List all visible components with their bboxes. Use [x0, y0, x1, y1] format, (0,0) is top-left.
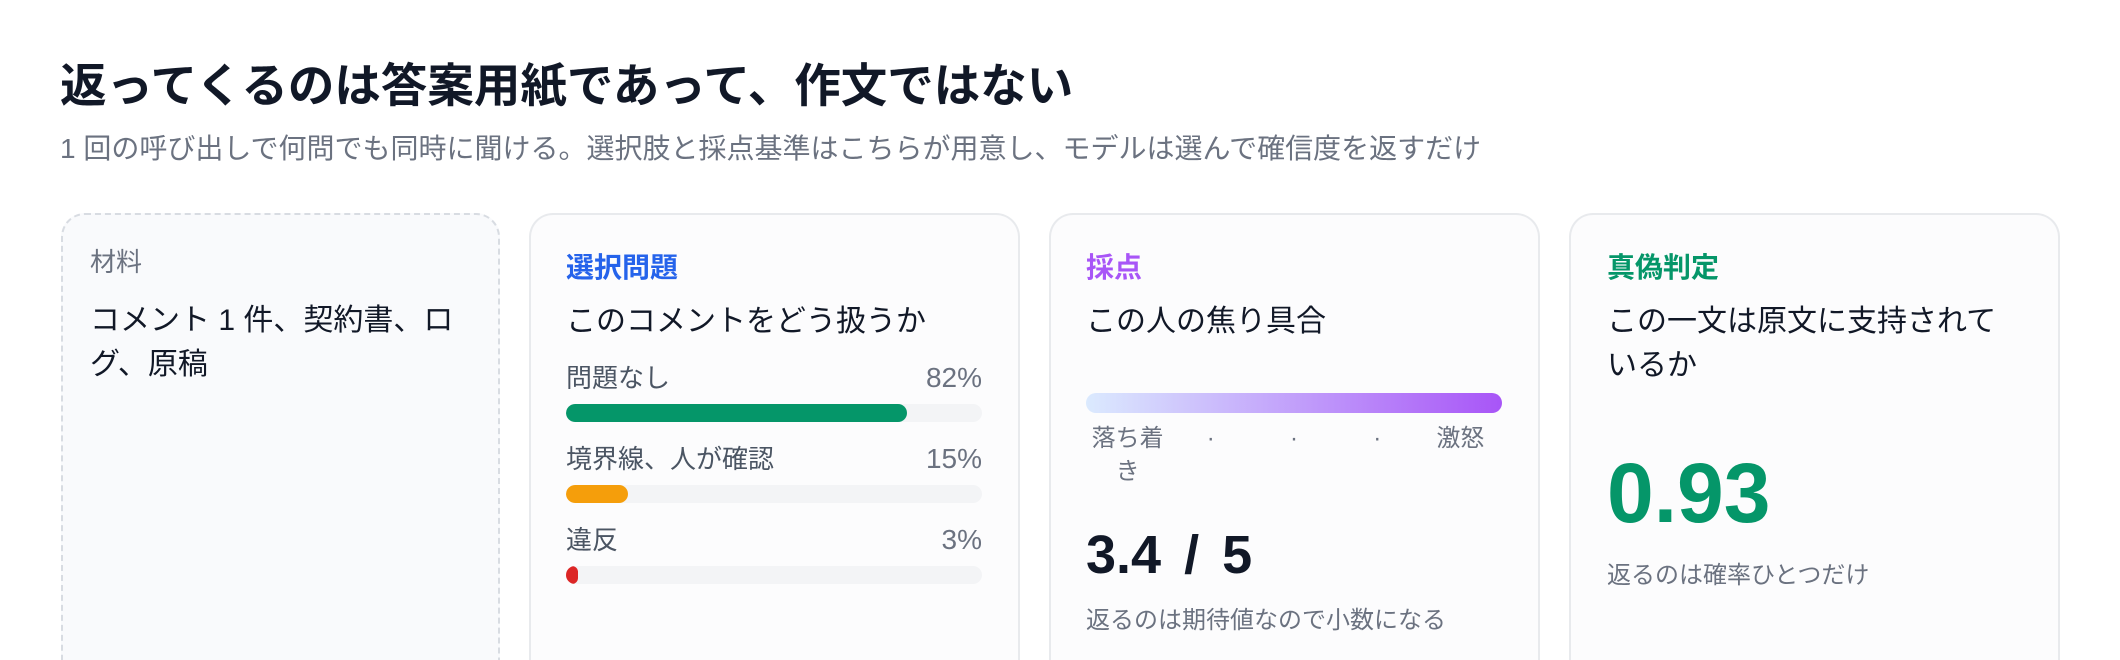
title: 返ってくるのは答案用紙であって、作文ではない [60, 60, 1073, 112]
bar: 82% [566, 404, 982, 422]
material description: コメント 1 件、契約書、ロ [90, 304, 453, 337]
scale labels: 落ち着き [1092, 425, 1164, 485]
scoring caption: 返るのは期待値なので小数になる [1086, 607, 1446, 634]
true/false question: この一文は原文に支持されて [1607, 305, 1996, 338]
scale labels: 激怒 [1436, 425, 1484, 452]
scale labels: · [1373, 425, 1381, 452]
true/false question [1607, 305, 1996, 382]
scoring heading: 採点 [1086, 252, 1142, 283]
row label: borderline: 境界線、人が確認 [566, 444, 774, 474]
score value: 3.4 / 5 [1086, 525, 1252, 585]
probability value: 0.93 [1607, 446, 1770, 540]
row value: 82%: 82% [926, 362, 982, 393]
row label: no problem: 問題なし [566, 363, 670, 393]
subtitle: 1 回の呼び出しで何問でも同時に聞ける。選択肢と採点基準はこちらが用意し、モデルは選んで確信度を返すだけ [60, 133, 1481, 164]
row value: 15%: 15% [926, 443, 982, 474]
row value: 3%: 3% [942, 524, 982, 555]
material description [90, 304, 453, 381]
bar: 15% [566, 485, 982, 503]
scoring question: この人の焦り具合 [1086, 305, 1326, 338]
material label: 材料 [90, 247, 142, 277]
scale labels: · [1207, 425, 1215, 452]
true/false question: いるか [1607, 349, 1697, 382]
true/false caption: 返るのは確率ひとつだけ [1607, 562, 1869, 589]
row label: violation: 違反 [566, 525, 618, 555]
scale labels [1092, 425, 1484, 485]
material description: グ、原稿 [90, 348, 208, 381]
scale labels: · [1290, 425, 1298, 452]
true/false heading: 真偽判定 [1607, 252, 1719, 283]
multiple choice question: このコメントをどう扱うか [566, 305, 926, 338]
multiple choice heading: 選択問題 [566, 252, 678, 283]
gradient scale [1086, 393, 1502, 413]
bar: 3% [566, 566, 982, 584]
